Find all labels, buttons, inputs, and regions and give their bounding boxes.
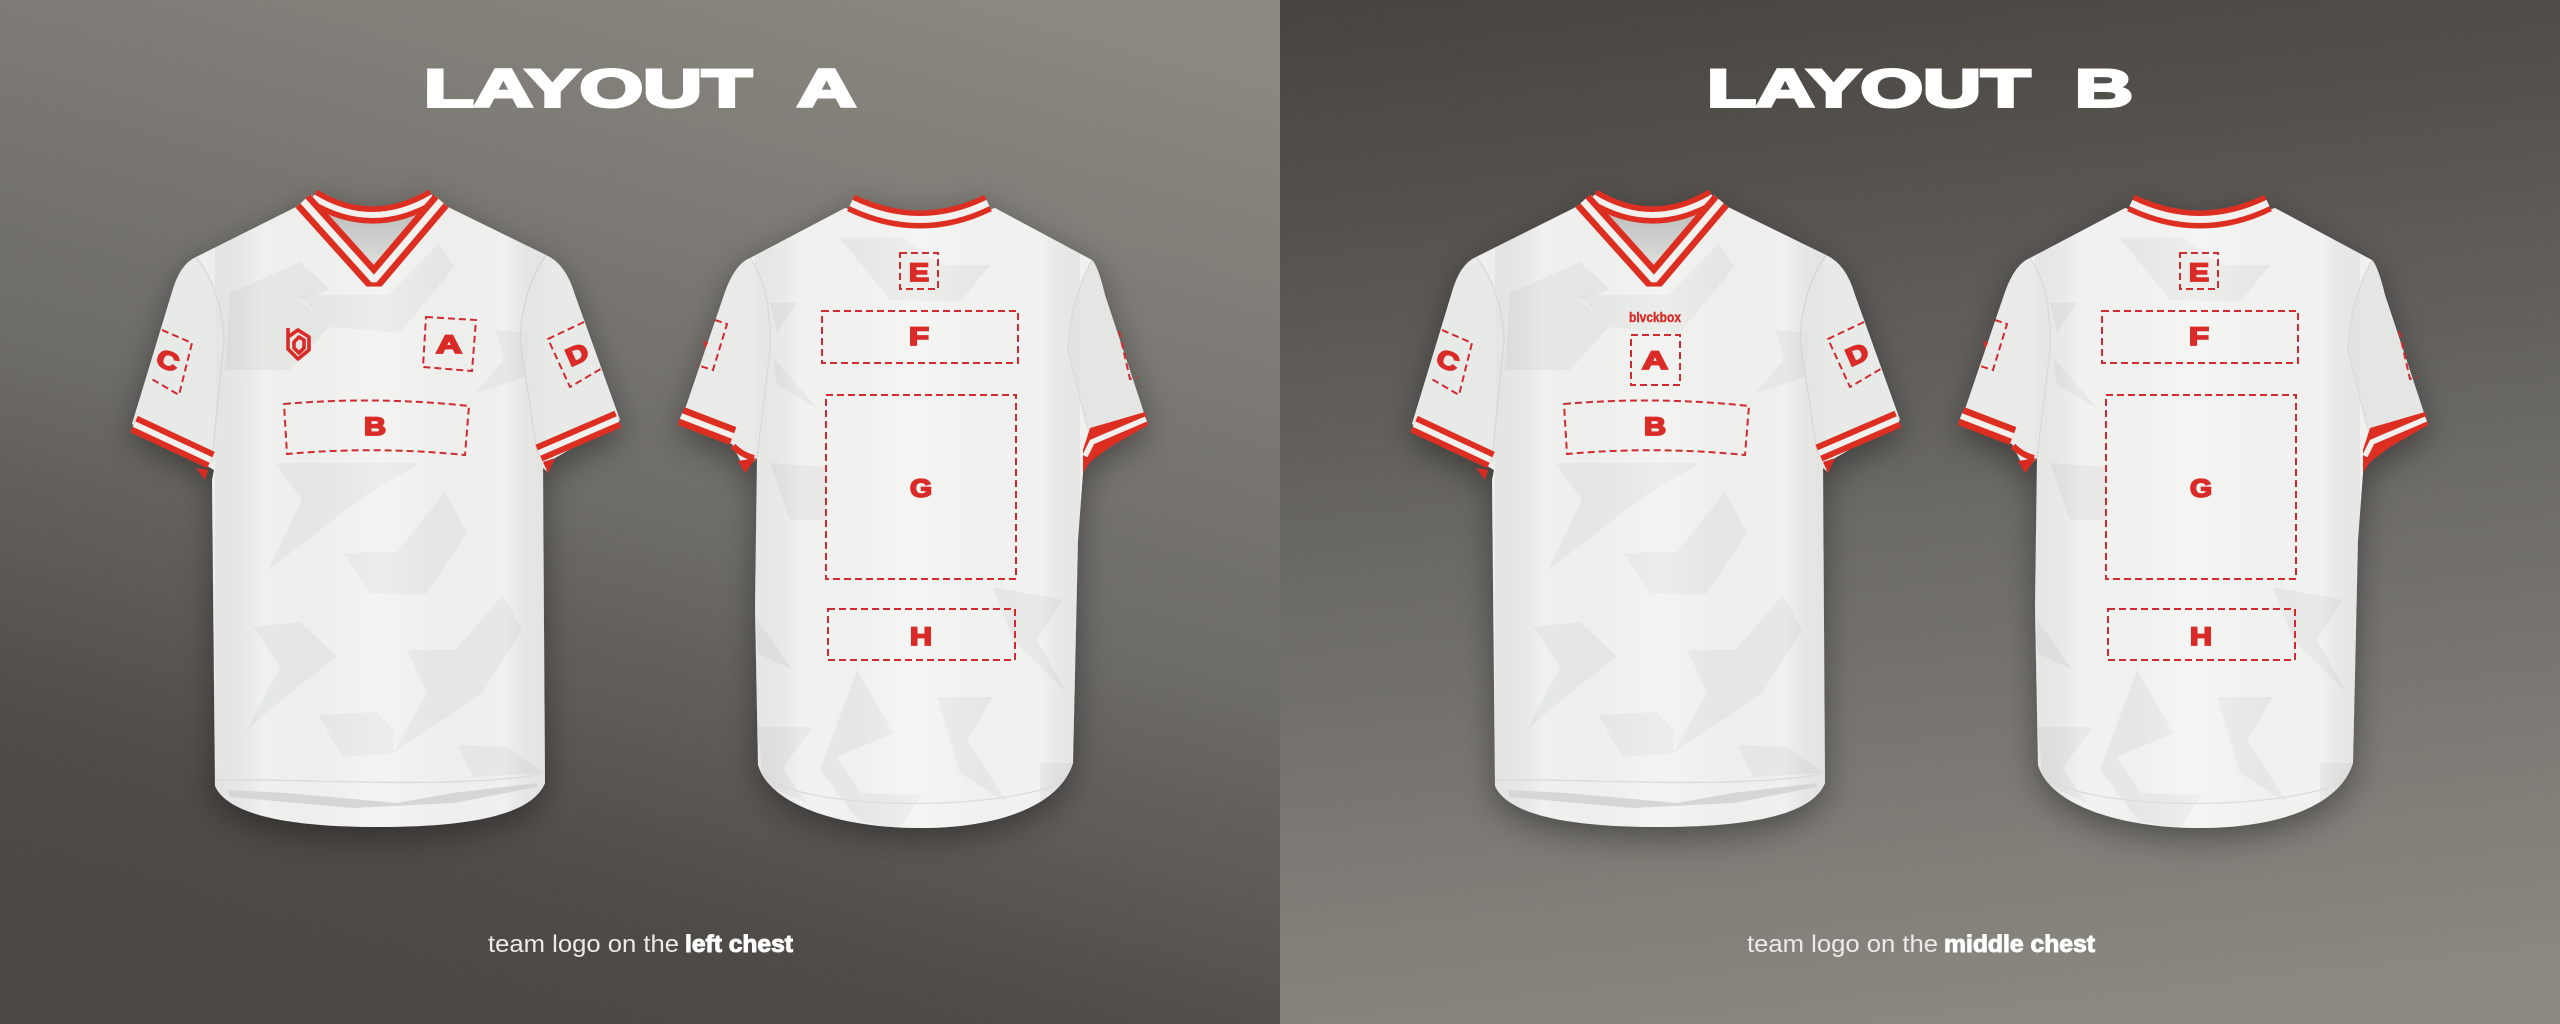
caption: layout B: team logo on the (1747, 931, 1938, 958)
placement box B (1564, 400, 1749, 455)
placement box G: G (2190, 475, 2212, 503)
placement box on right sleeve, wrapped from front (2399, 331, 2417, 379)
placement box A: A (436, 331, 462, 359)
placement box F (822, 311, 1018, 363)
placement box A (1631, 335, 1680, 385)
placement box D on sleeve (1828, 322, 1884, 387)
placement box G: G (910, 475, 932, 503)
placement box C on sleeve: C (1432, 344, 1463, 378)
placement box E (2180, 253, 2218, 289)
caption: layout B (1747, 931, 2095, 958)
jersey: layout A front (132, 195, 620, 840)
placement box H (2108, 609, 2295, 660)
placement box H: H (2190, 623, 2212, 651)
placement box on left sleeve, wrapped from front (697, 320, 727, 370)
placement box on left sleeve, wrapped from front (1977, 320, 2007, 370)
placement box H (828, 609, 1015, 660)
placement box G (2106, 395, 2296, 579)
placement box B (284, 400, 469, 455)
caption: layout A: team logo on the (488, 931, 679, 958)
placement box C on sleeve: C (152, 344, 183, 378)
jersey: layout B back (1960, 200, 2428, 840)
placement box E: E (909, 259, 929, 287)
placement box A (423, 317, 476, 371)
panel: layout B background (1280, 0, 2560, 1024)
placement box D on sleeve: D (562, 338, 593, 372)
placement box H: H (910, 623, 932, 651)
title: layout B: LAYOUT B (1707, 60, 2133, 118)
placement box F (2102, 311, 2298, 363)
placement box B: B (364, 413, 386, 441)
panel: layout A background (0, 0, 1280, 1024)
placement box E (900, 253, 938, 289)
placement box on right sleeve, wrapped from front (1119, 331, 1137, 379)
sponsor wordmark above box A: blvckbox (1629, 309, 1681, 325)
caption: layout A: left chest (685, 931, 793, 958)
placement box D on sleeve (548, 322, 604, 387)
icon: team logo on left chest (288, 328, 309, 359)
title: layout A: LAYOUT A (424, 60, 856, 118)
placement box C on sleeve (150, 330, 192, 395)
placement box C on sleeve (1430, 330, 1472, 395)
placement box F: F (2189, 323, 2209, 351)
placement box E: E (2189, 259, 2209, 287)
placement box A: A (1642, 347, 1668, 375)
placement box G (826, 395, 1016, 579)
placement box F: F (909, 323, 929, 351)
jersey: layout A back (680, 200, 1148, 840)
placement box B: B (1644, 413, 1666, 441)
caption: layout B: middle chest (1944, 931, 2095, 958)
jersey: layout B front (1412, 195, 1900, 840)
placement box D on sleeve: D (1842, 338, 1873, 372)
caption: layout A (488, 931, 793, 958)
